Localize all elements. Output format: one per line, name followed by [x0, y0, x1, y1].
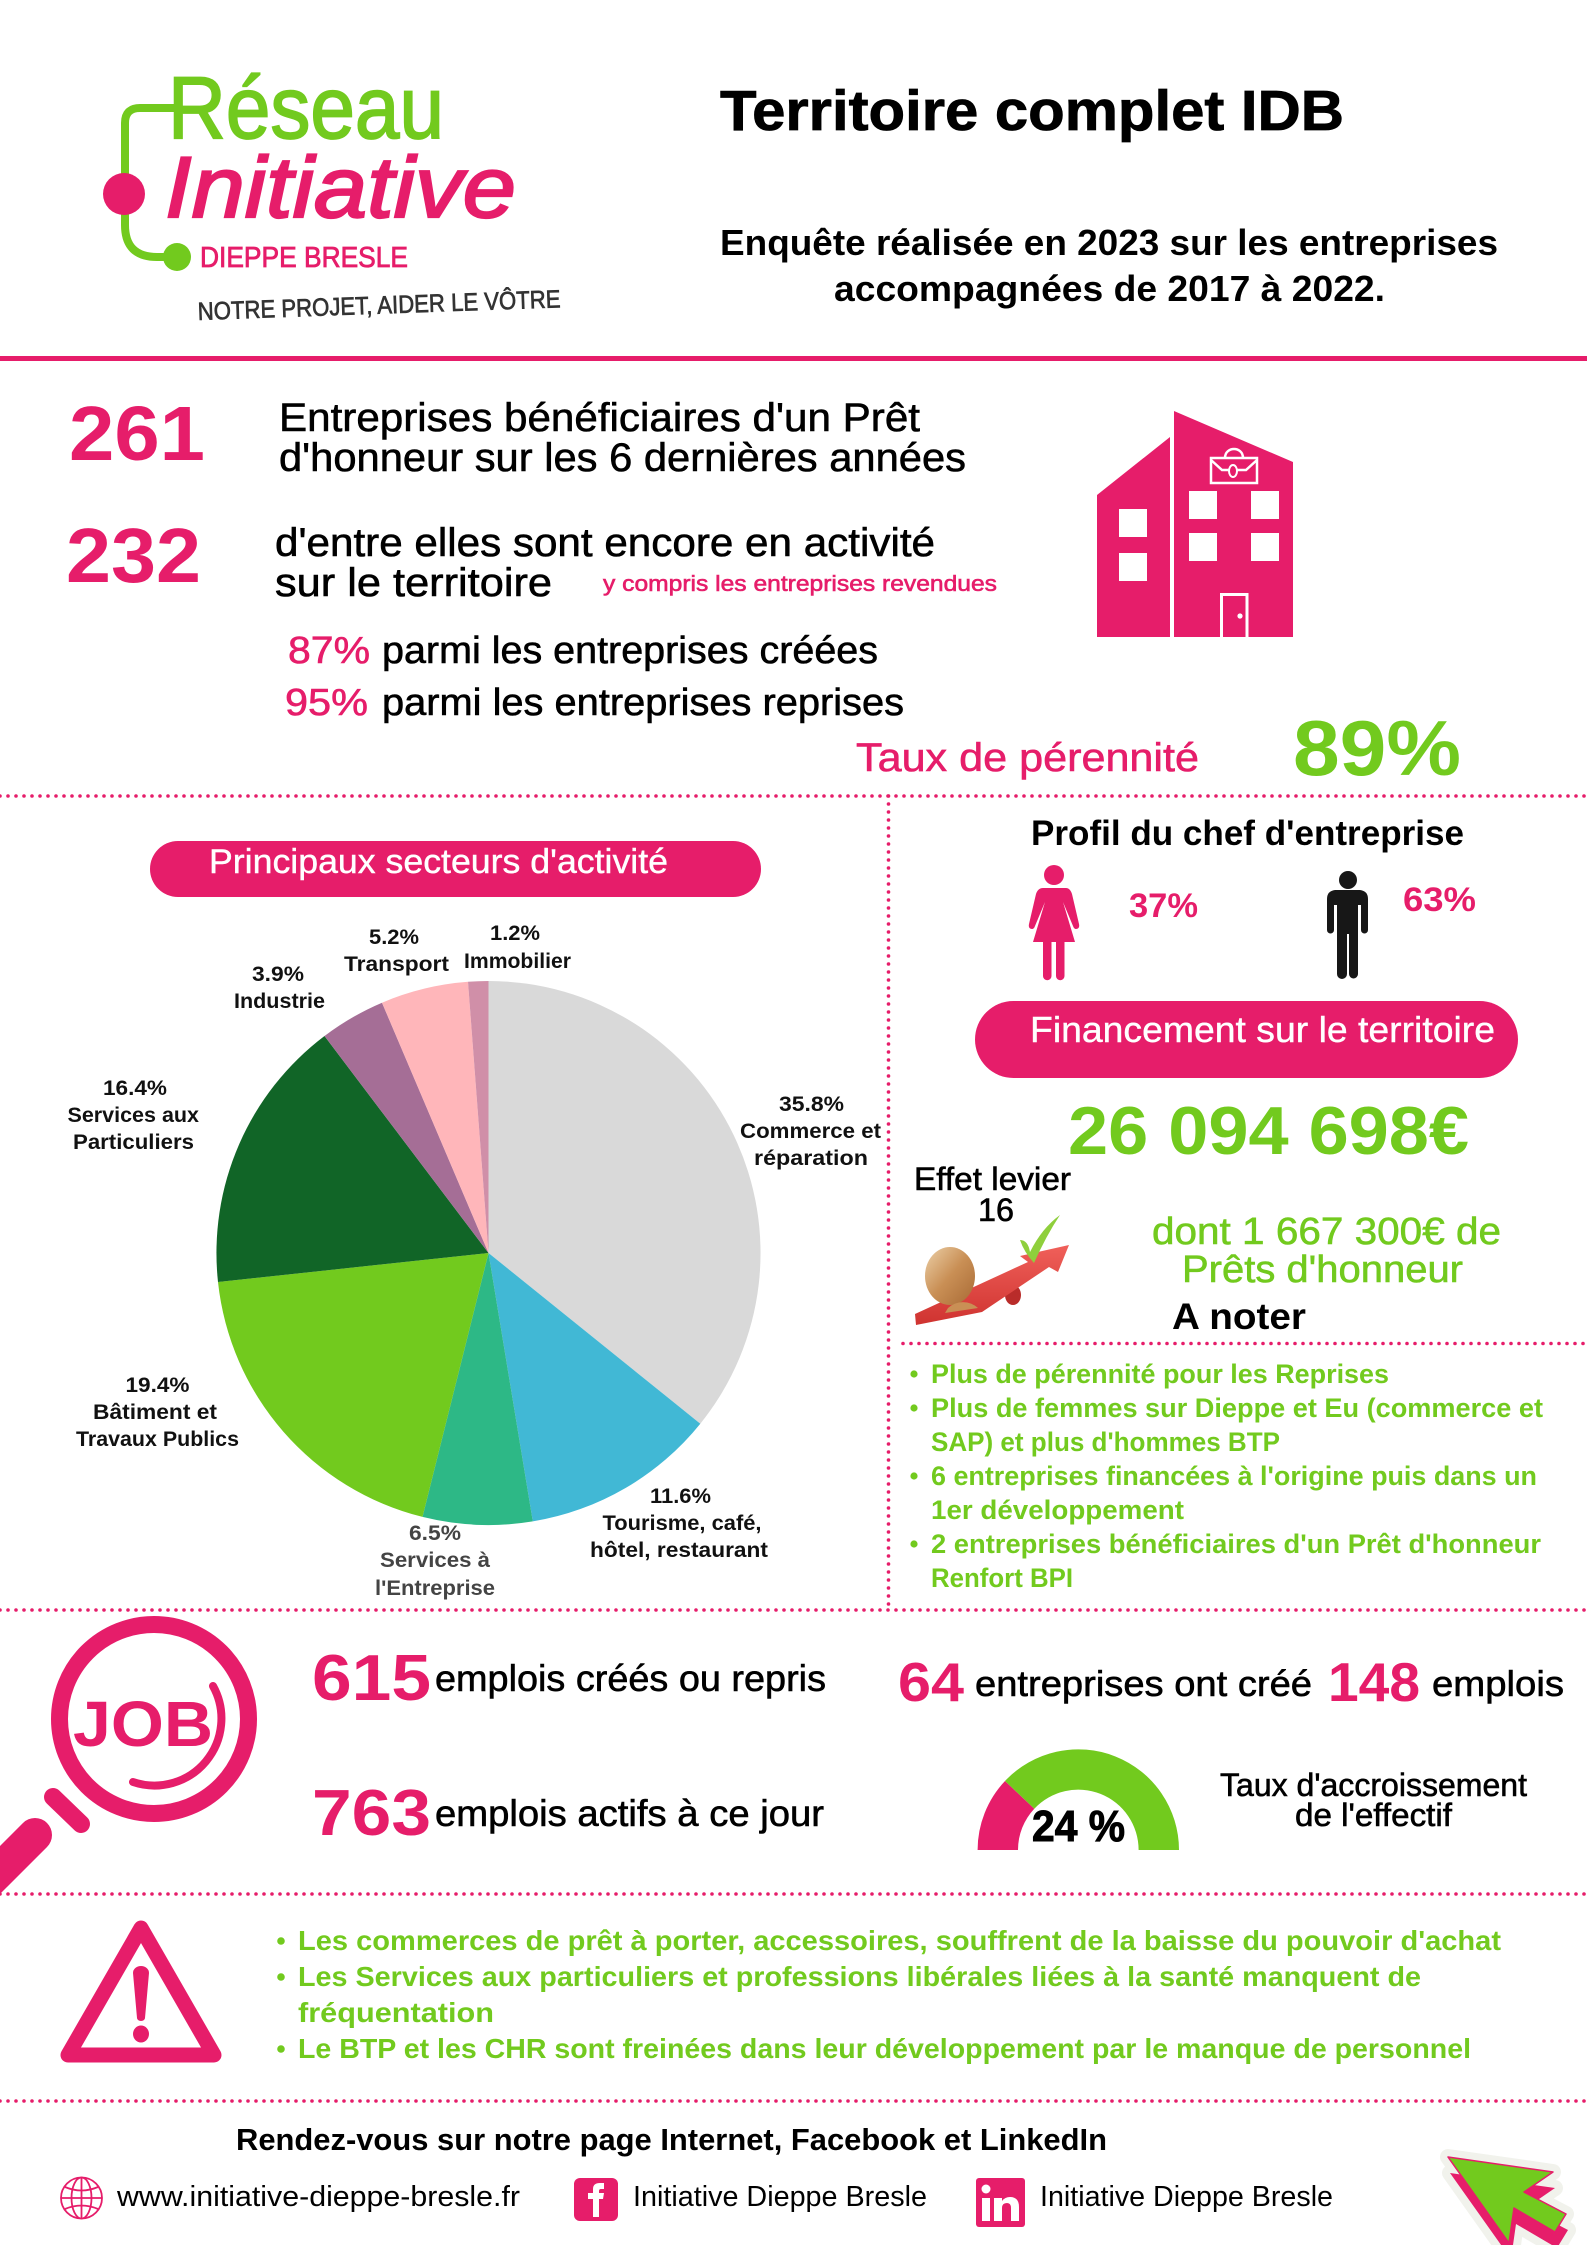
- pie label: Tourisme: Tourisme, café,: [602, 1512, 762, 1535]
- subtitle: Enquête réalisée en 2023 sur les entreprises: [720, 222, 1498, 263]
- list: a noter: [910, 1359, 1543, 1593]
- subtitle: [720, 222, 1498, 309]
- stat: financement total: 26 094 698€: [1068, 1093, 1469, 1169]
- list: a noter: Plus de pérennité pour les Reprises: [931, 1359, 1389, 1389]
- stat: 95% reprises: 95%: [285, 682, 368, 724]
- pie label: Services à l'Entreprise: 6.5%: [409, 1522, 461, 1545]
- text: 37%: 37%: [1129, 887, 1198, 925]
- pie label: Services à l'Entreprise: [375, 1522, 495, 1600]
- stat: 64 entreprises 148 emplois: emplois: [1432, 1663, 1564, 1704]
- stat: 95% reprises: parmi les entreprises reprises: [382, 682, 904, 724]
- text: 63%: 63%: [1403, 881, 1476, 919]
- text: facebook: Initiative Dieppe Bresle: [633, 2181, 927, 2213]
- stat: taux de pérennité: [856, 704, 1461, 792]
- panel heading: financement: Financement sur le territoire: [1030, 1009, 1495, 1050]
- pie label: Commerce et réparation: Commerce et: [740, 1120, 881, 1143]
- pie label: Commerce et réparation: réparation: [754, 1147, 868, 1170]
- list: a noter: Renfort BPI: [931, 1563, 1073, 1593]
- pie label: Industrie: [234, 963, 325, 1013]
- pie label: Tourisme: [590, 1485, 768, 1562]
- icon: job magnifier: JOB: [73, 1688, 213, 1760]
- stat: 64 entreprises 148 emplois: 64: [898, 1651, 964, 1713]
- heading: profil du chef d'entreprise: Profil du chef d'entreprise: [1031, 814, 1464, 853]
- text: taux d'accroissement: de l'effectif: [1295, 1797, 1452, 1833]
- stat: 87% créées: parmi les entreprises créées: [382, 630, 878, 672]
- stat: 261 entreprises: 261: [69, 391, 205, 477]
- icon: cursor arrow: [1448, 2157, 1568, 2245]
- logo: Réseau Initiative Dieppe Bresle: [103, 58, 561, 326]
- stat: 261 entreprises: [69, 391, 966, 480]
- pie label: Tourisme: hôtel, restaurant: [590, 1539, 768, 1562]
- title: Territoire complet IDB: [720, 79, 1344, 143]
- pie chart: secteurs d'activité: [216, 981, 761, 1525]
- pie label: Bâtiment et Travaux Publics: 19.4%: [126, 1374, 190, 1397]
- stat: taux de pérennité: Taux de pérennité: [856, 736, 1199, 780]
- icon: job magnifier: [0, 1624, 248, 1885]
- stat: 232 en activité: y compris les entreprises revendues: [603, 571, 997, 596]
- pie label: Commerce et réparation: 35.8%: [779, 1093, 844, 1116]
- logo: Réseau Initiative Dieppe Bresle: Réseau: [168, 58, 444, 157]
- pie label: Services aux Particuliers: Particuliers: [73, 1131, 194, 1154]
- text: prêts d'honneur: [1152, 1211, 1501, 1291]
- list: a noter: 6 entreprises financées à l'origine puis dans un: [931, 1461, 1537, 1491]
- panel heading: principaux secteurs: Principaux secteurs d'activité: [209, 843, 668, 881]
- stat: 615 emplois: [312, 1641, 826, 1714]
- list: a noter: SAP) et plus d'hommes BTP: [931, 1427, 1280, 1457]
- pie label: Tourisme: 11.6%: [650, 1485, 711, 1508]
- pie label: Bâtiment et Travaux Publics: [76, 1374, 239, 1451]
- stat: taux de pérennité: 89%: [1293, 704, 1461, 792]
- stat: 261 entreprises: d'honneur sur les 6 dernières années: [279, 436, 966, 480]
- pie label: Immobilier: 1.2%: [490, 922, 540, 945]
- pie label: Immobilier: [464, 922, 571, 973]
- icon: woman: [1029, 865, 1079, 980]
- list: difficultés: Les Services aux particuliers et professions libérales liées à la santé manquent de: [298, 1961, 1421, 1992]
- pie label: Services à l'Entreprise: Services à: [380, 1549, 490, 1572]
- text: prêts d'honneur: Prêts d'honneur: [1182, 1249, 1463, 1291]
- icon: globe: [61, 2178, 102, 2218]
- text: prêts d'honneur: dont 1 667 300€ de: [1152, 1211, 1501, 1253]
- stat: 87% créées: 87%: [288, 630, 370, 672]
- pie label: Bâtiment et Travaux Publics: Bâtiment et: [93, 1401, 217, 1424]
- pie label: Industrie: Industrie: [234, 990, 325, 1013]
- stat: 232 en activité: [66, 513, 997, 605]
- pie label: Transport: [344, 926, 449, 976]
- stat: 261 entreprises: Entreprises bénéficiaires d'un Prêt: [279, 396, 920, 440]
- heading: rendez-vous: Rendez-vous sur notre page Internet, Facebook et LinkedIn: [236, 2122, 1107, 2157]
- pie label: Transport: 5.2%: [369, 926, 419, 949]
- pie label: Services aux Particuliers: [68, 1077, 199, 1154]
- stat: 763 emplois: emplois actifs à ce jour: [435, 1793, 824, 1834]
- list: a noter: Plus de femmes sur Dieppe et Eu (commerce et: [931, 1393, 1543, 1423]
- text: effet levier: 16: [978, 1192, 1014, 1228]
- gauge: 24%: [978, 1749, 1179, 1851]
- logo: Réseau Initiative Dieppe Bresle: DIEPPE BRESLE: [200, 242, 408, 274]
- stat: 232 en activité: sur le territoire: [275, 561, 552, 605]
- icon: facebook: [574, 2178, 618, 2221]
- logo: Réseau Initiative Dieppe Bresle: Initiative: [165, 140, 516, 236]
- list: difficultés: [277, 1925, 1501, 2064]
- pie label: Industrie: 3.9%: [252, 963, 304, 986]
- stat: 64 entreprises 148 emplois: [898, 1651, 1564, 1713]
- pie label: Transport: Transport: [344, 953, 449, 976]
- pie label: Services à l'Entreprise: l'Entreprise: [375, 1577, 495, 1600]
- pie label: Commerce et réparation: [740, 1093, 881, 1170]
- stat: 64 entreprises 148 emplois: 148: [1328, 1651, 1420, 1713]
- icon: leverage coin and arrow: [915, 1215, 1069, 1325]
- pie label: Services aux Particuliers: 16.4%: [103, 1077, 167, 1100]
- list: difficultés: Le BTP et les CHR sont freinées dans leur développement par le manque de personnel: [298, 2033, 1471, 2064]
- stat: 763 emplois: 763: [312, 1776, 431, 1849]
- pie label: Bâtiment et Travaux Publics: Travaux Publics: [76, 1428, 239, 1451]
- icon: man: [1327, 871, 1368, 979]
- icon: linkedin: [976, 2178, 1025, 2227]
- text: effet levier: Effet levier: [914, 1161, 1071, 1197]
- gauge: 24%: 24 %: [1032, 1802, 1125, 1851]
- panel heading: principaux secteurs: [150, 841, 761, 897]
- stat: 232 en activité: d'entre elles sont encore en activité: [275, 521, 935, 565]
- stat: 615 emplois: emplois créés ou repris: [435, 1658, 826, 1699]
- pie label: Services aux Particuliers: Services aux: [68, 1104, 199, 1127]
- text: site web: www.initiative-dieppe-bresle.fr: [116, 2181, 520, 2213]
- text: taux d'accroissement: Taux d'accroissement: [1220, 1767, 1527, 1803]
- icon: warning triangle: [68, 1928, 214, 2055]
- text: linkedin: Initiative Dieppe Bresle: [1040, 2181, 1333, 2213]
- panel heading: financement: [975, 1001, 1518, 1078]
- list: a noter: 2 entreprises bénéficiaires d'un Prêt d'honneur: [931, 1529, 1541, 1559]
- subtitle: accompagnées de 2017 à 2022.: [834, 268, 1385, 309]
- logo: Réseau Initiative Dieppe Bresle: NOTRE PROJET, AIDER LE VÔTRE: [197, 284, 561, 326]
- text: effet levier: [914, 1161, 1071, 1228]
- stat: 763 emplois: [312, 1776, 824, 1849]
- pie label: Immobilier: Immobilier: [464, 950, 571, 973]
- text: taux d'accroissement: [1220, 1767, 1527, 1833]
- stat: 615 emplois: 615: [312, 1641, 431, 1714]
- list: difficultés: Les commerces de prêt à porter, accessoires, souffrent de la baisse du pouvoir d'achat: [298, 1925, 1501, 1956]
- stat: 64 entreprises 148 emplois: entreprises ont créé: [975, 1663, 1312, 1704]
- list: a noter: 1er développement: [931, 1495, 1184, 1525]
- stat: 232 en activité: 232: [66, 513, 201, 599]
- list: difficultés: fréquentation: [298, 1997, 494, 2028]
- heading: a noter: A noter: [1172, 1296, 1306, 1337]
- icon: building: [1097, 411, 1293, 637]
